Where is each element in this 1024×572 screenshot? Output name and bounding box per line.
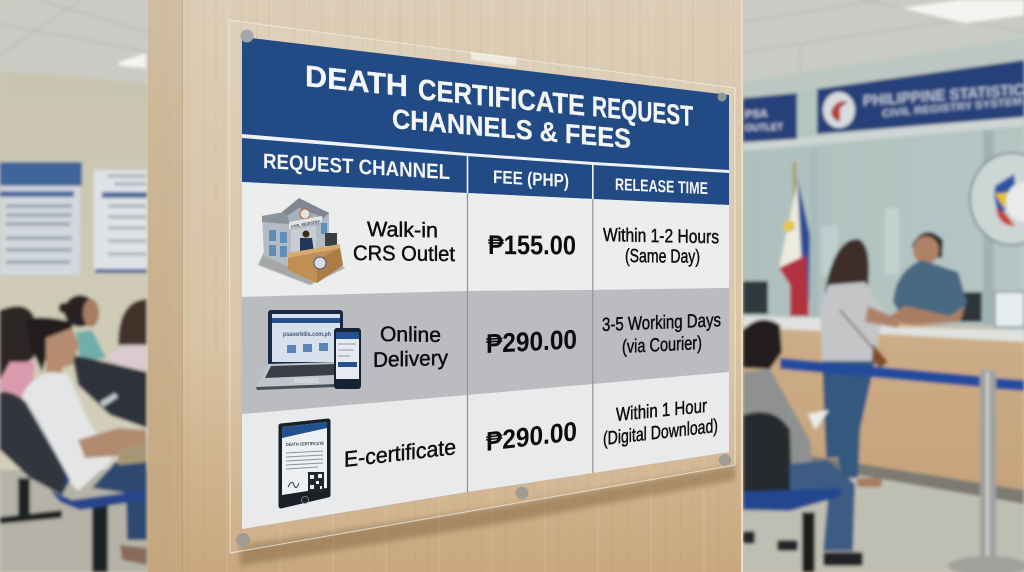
- row 1: walk-in: [242, 182, 729, 297]
- background: service counter area at right: [743, 0, 1024, 572]
- seated person: man in white shirt: [22, 317, 147, 565]
- main sign: Philippine Statistics: CIVIL REGISTRY SYSTEM: [882, 95, 1022, 120]
- title rule and column rules: [242, 134, 729, 173]
- header panel: navy: [242, 37, 729, 205]
- queue barrier with stanchion: [780, 358, 1024, 572]
- ceiling: [0, 0, 150, 84]
- chair back and blue seat: [0, 392, 147, 510]
- release time: within 1 hour: Within 1 Hour: [616, 396, 708, 426]
- title: [305, 60, 693, 154]
- sign board: [242, 37, 729, 529]
- release time: within 1-2 hours: [603, 225, 719, 268]
- label: walk-in CRS outlet: Walk-in: [367, 218, 438, 242]
- small sign: PSA outlet: OUTLET: [745, 122, 783, 134]
- release time: within 1-2 hours: (Same Day): [625, 246, 700, 268]
- icon: CRS outlet building and desk: CIVIL REGISTRY: [291, 219, 320, 229]
- seated person: woman with long hair: [107, 299, 147, 376]
- release time: 3-5 working days: (via Courier): [622, 333, 702, 358]
- standoff bolts: [236, 30, 731, 547]
- chair: front seat: [0, 478, 108, 572]
- icon: CRS outlet building and desk: [258, 198, 345, 285]
- row 2: online delivery: [242, 288, 729, 414]
- standing woman: [820, 239, 900, 487]
- column heading: release time: RELEASE TIME: [615, 175, 708, 198]
- seated person: woman with pink top: [0, 306, 36, 400]
- title: REQUEST: [592, 91, 693, 133]
- small sign: PSA outlet: PSA: [745, 108, 768, 121]
- info stand on counter: [995, 292, 1024, 327]
- icon: laptop and phone: [256, 310, 361, 390]
- poster: left wall notice: [0, 162, 82, 275]
- ceiling with light panel: [743, 0, 1024, 100]
- label: online delivery: Delivery: [373, 347, 448, 372]
- board cast shadow on wood: [240, 465, 735, 566]
- dark chair behind officer: [960, 292, 982, 322]
- acrylic mount panel: [229, 20, 735, 553]
- wood pillar: [148, 0, 743, 572]
- Philippine flag: [779, 162, 810, 316]
- release time: 3-5 working days: [602, 310, 721, 358]
- release time: within 1-2 hours: Within 1-2 Hours: [603, 225, 719, 248]
- title: DEATH: [305, 60, 408, 103]
- glass partition: [743, 115, 1024, 330]
- release time: within 1 hour: [603, 396, 718, 450]
- title: CHANNELS & FEES: [392, 103, 631, 154]
- label: walk-in CRS outlet: CRS Outlet: [353, 242, 455, 266]
- small sign: PSA outlet: [743, 93, 797, 142]
- background: waiting area at left: [0, 0, 150, 572]
- release time: 3-5 working days: 3-5 Working Days: [602, 310, 721, 336]
- counter: [743, 316, 1024, 504]
- label: online delivery: [373, 323, 448, 372]
- icon: laptop and phone: psaserbilis.com.ph: [283, 331, 331, 338]
- label: e-certificate: E-certificate: [344, 434, 456, 472]
- title: CERTIFICATE: [418, 74, 585, 123]
- main sign: Philippine Statistics: [817, 60, 1024, 134]
- release time: within 1 hour: (Digital Download): [603, 416, 718, 450]
- fee: 290 e-certificate: ₱290.00: [486, 415, 577, 457]
- label: online delivery: Online: [380, 323, 441, 347]
- label: walk-in CRS outlet: [353, 218, 455, 266]
- floor: [0, 470, 150, 572]
- column heading: fee: FEE (PHP): [493, 166, 569, 191]
- icon: phone with e-certificate: DEATH CERTIFICATE: [286, 441, 324, 447]
- phone held by man: [100, 393, 118, 407]
- PSA wall emblem: [970, 153, 1024, 245]
- fee: 155: ₱155.00: [488, 230, 576, 260]
- seated person: woman with teal top: [58, 295, 106, 362]
- column heading: request channel: REQUEST CHANNEL: [263, 150, 450, 184]
- chair row: back seats: [72, 355, 147, 428]
- row 3: e-certificate: [242, 372, 729, 529]
- monitor behind counter: [743, 281, 768, 314]
- seated man with chair: [743, 320, 863, 572]
- officer in uniform: [890, 232, 967, 326]
- column dividers: [468, 193, 593, 492]
- floor: [743, 455, 1024, 572]
- fee: 290 online: ₱290.00: [486, 324, 577, 359]
- poster: right wall notice: [94, 170, 147, 273]
- icon: phone with e-certificate: [281, 421, 328, 506]
